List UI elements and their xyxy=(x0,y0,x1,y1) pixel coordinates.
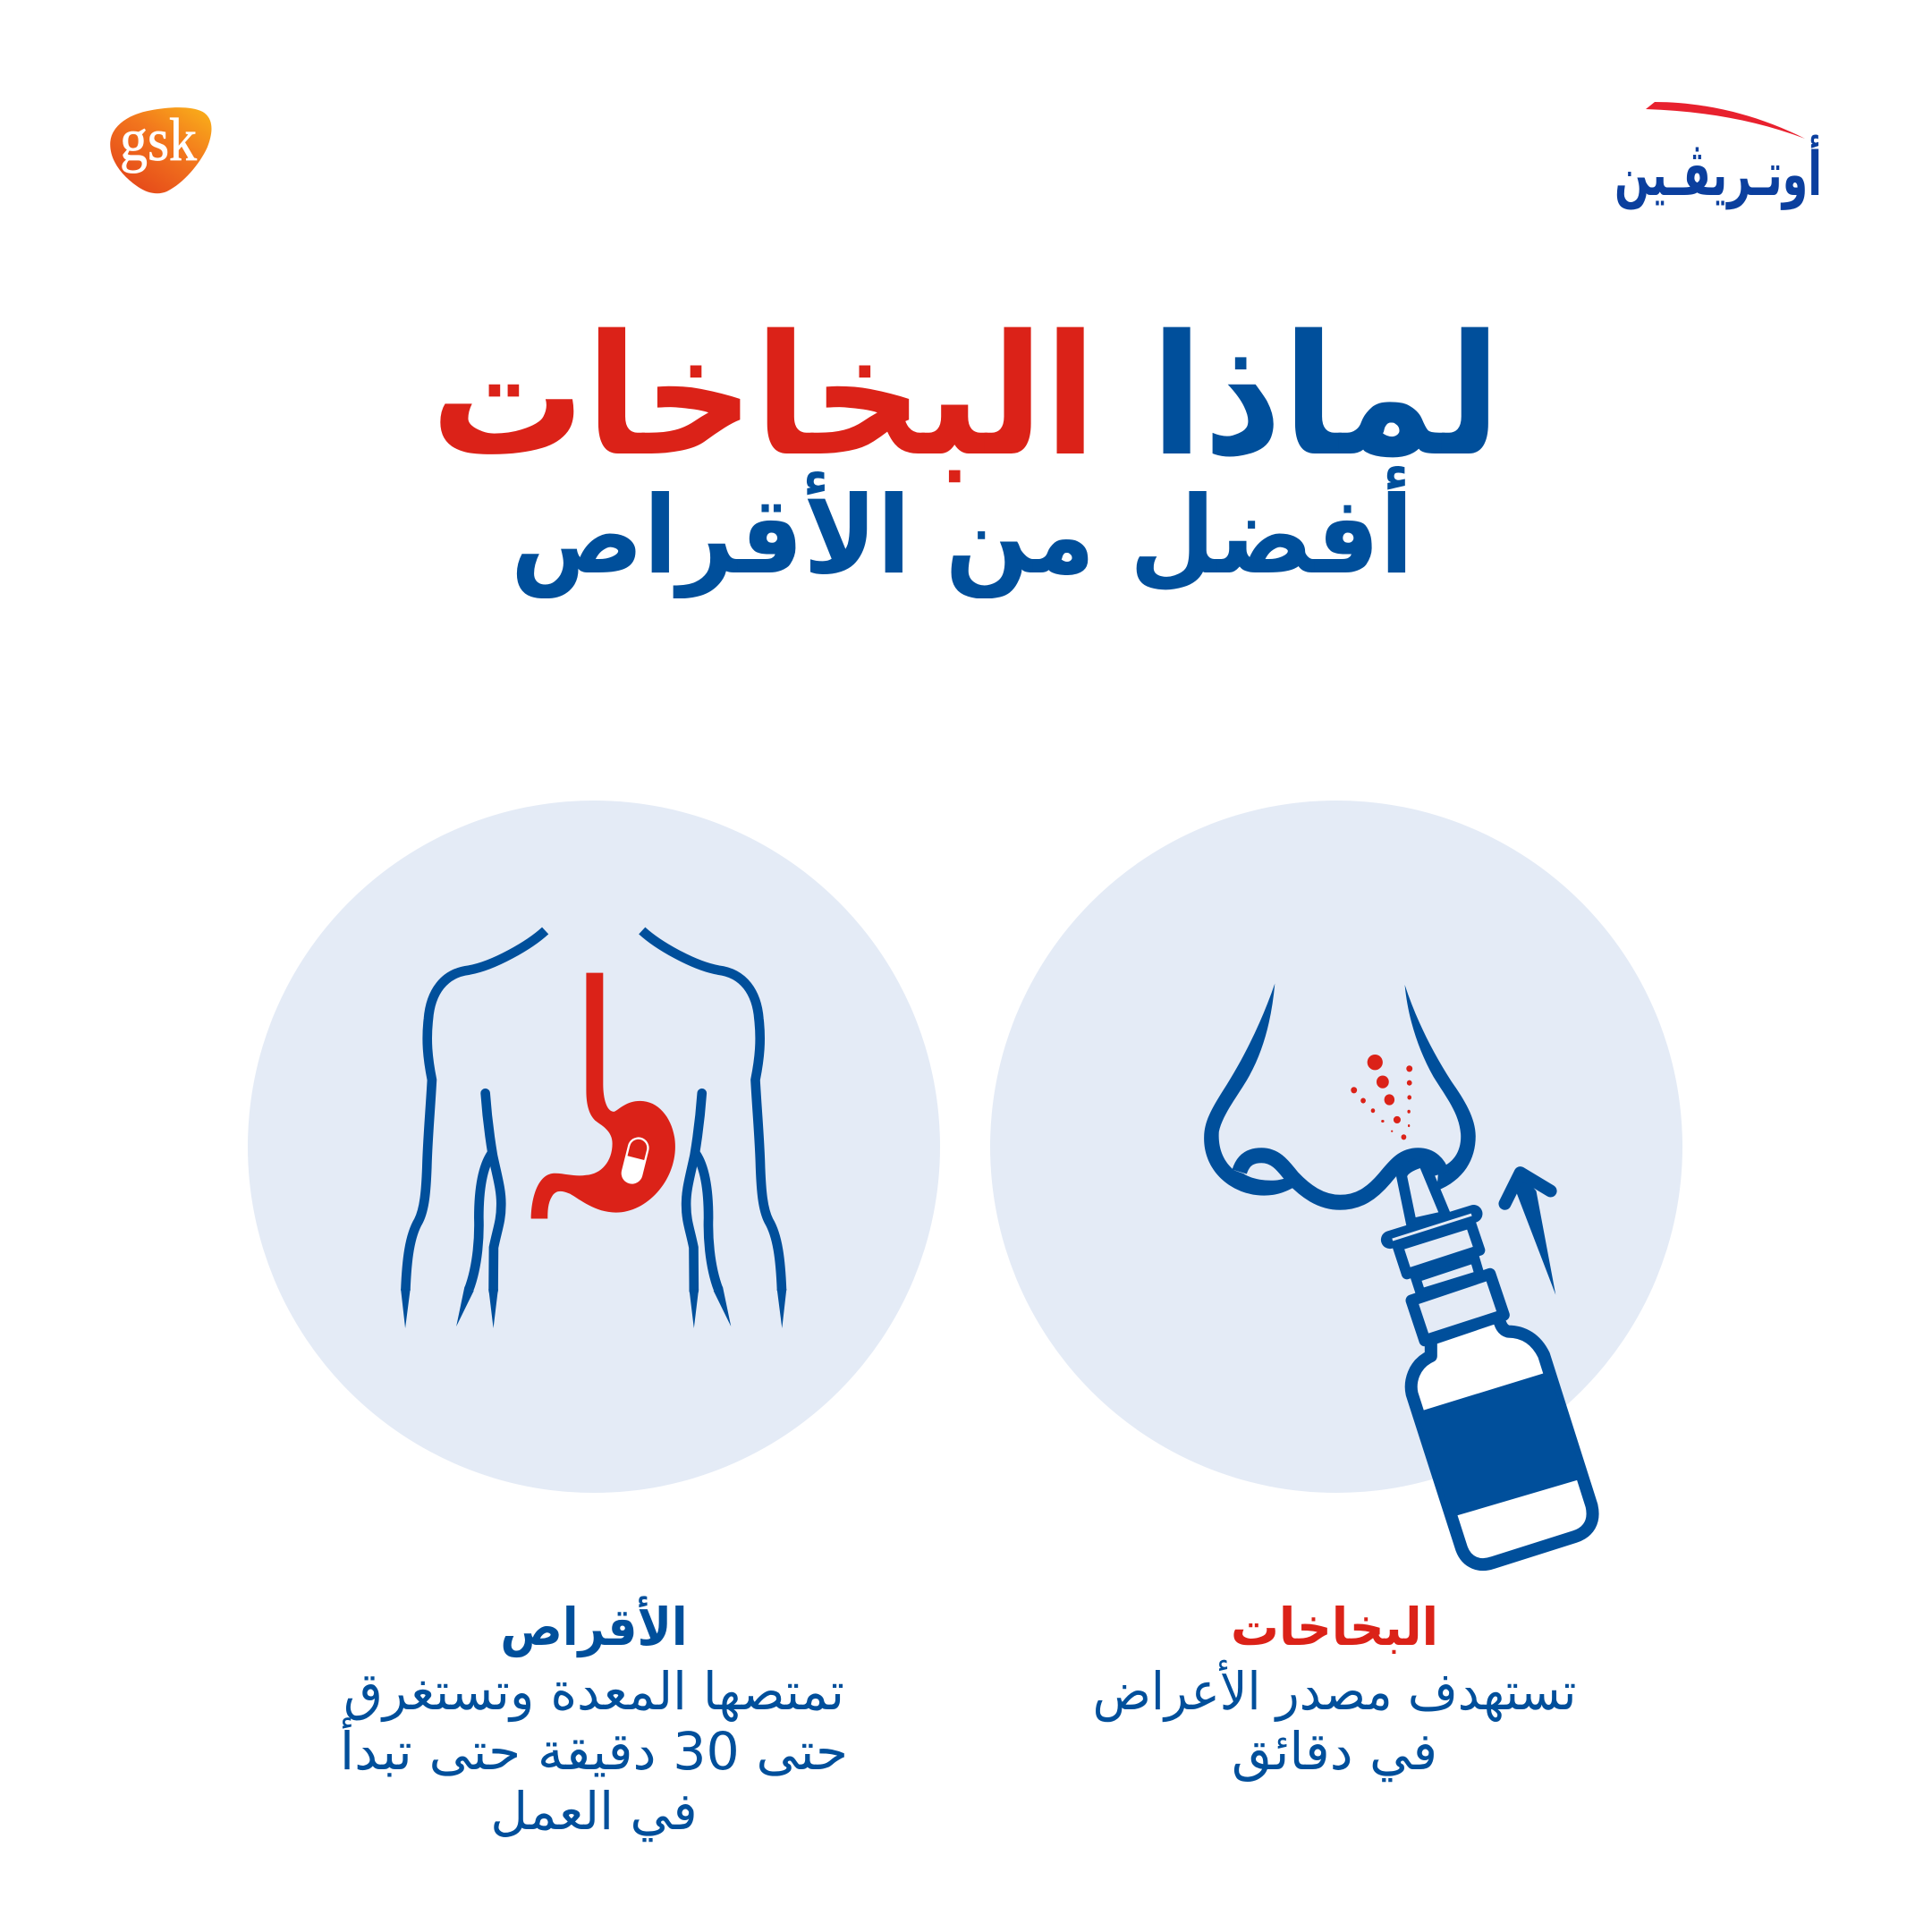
logo: gsk: gsk xyxy=(120,106,197,174)
tablets description xyxy=(340,1661,848,1843)
title line 2: أفضل من الأقراص xyxy=(511,474,1413,598)
bottle body xyxy=(1411,1317,1593,1564)
spray droplets xyxy=(1351,1055,1412,1140)
capsule xyxy=(619,1135,651,1186)
icon: nose with spray xyxy=(1204,983,1593,1564)
spray description: تستهدف مصدر الأعراض xyxy=(1093,1661,1576,1722)
icon: torso with stomach xyxy=(401,930,786,1328)
arrow up xyxy=(1504,1173,1555,1295)
nasal spray bottle xyxy=(1390,1162,1593,1564)
spray description: في دقائق xyxy=(1232,1721,1437,1782)
nozzle xyxy=(1402,1162,1445,1224)
logo: Otrivin swoosh and wordmark xyxy=(1614,102,1822,210)
panel: nasal spray circle xyxy=(990,801,1682,1493)
spray text block xyxy=(1093,1597,1576,1782)
title line 1: لماذا البخاخات xyxy=(430,299,1501,493)
torso left side xyxy=(401,930,546,1328)
nose xyxy=(1204,983,1476,1202)
stomach xyxy=(531,973,675,1219)
tablets heading: الأقراص xyxy=(500,1597,688,1657)
bottle label band xyxy=(1417,1371,1583,1517)
spray description xyxy=(1093,1660,1576,1782)
panel: tablets circle xyxy=(248,801,940,1493)
tablets text block xyxy=(340,1596,848,1843)
logo: Otrivin swoosh and wordmark: أوتـريڤـين xyxy=(1614,134,1822,210)
flange xyxy=(1390,1214,1473,1240)
tablets description: في العمل xyxy=(490,1781,698,1842)
tablets description: تمتصها المعدة وتستغرق xyxy=(343,1661,844,1722)
lower collar xyxy=(1411,1274,1504,1341)
logo: gsk xyxy=(110,106,211,193)
torso right side xyxy=(642,930,786,1328)
neck xyxy=(1416,1258,1479,1293)
spray heading: البخاخات xyxy=(1231,1597,1438,1657)
upper collar xyxy=(1398,1223,1479,1274)
tablets description: حتى 30 دقيقة حتى تبدأ xyxy=(340,1721,848,1782)
